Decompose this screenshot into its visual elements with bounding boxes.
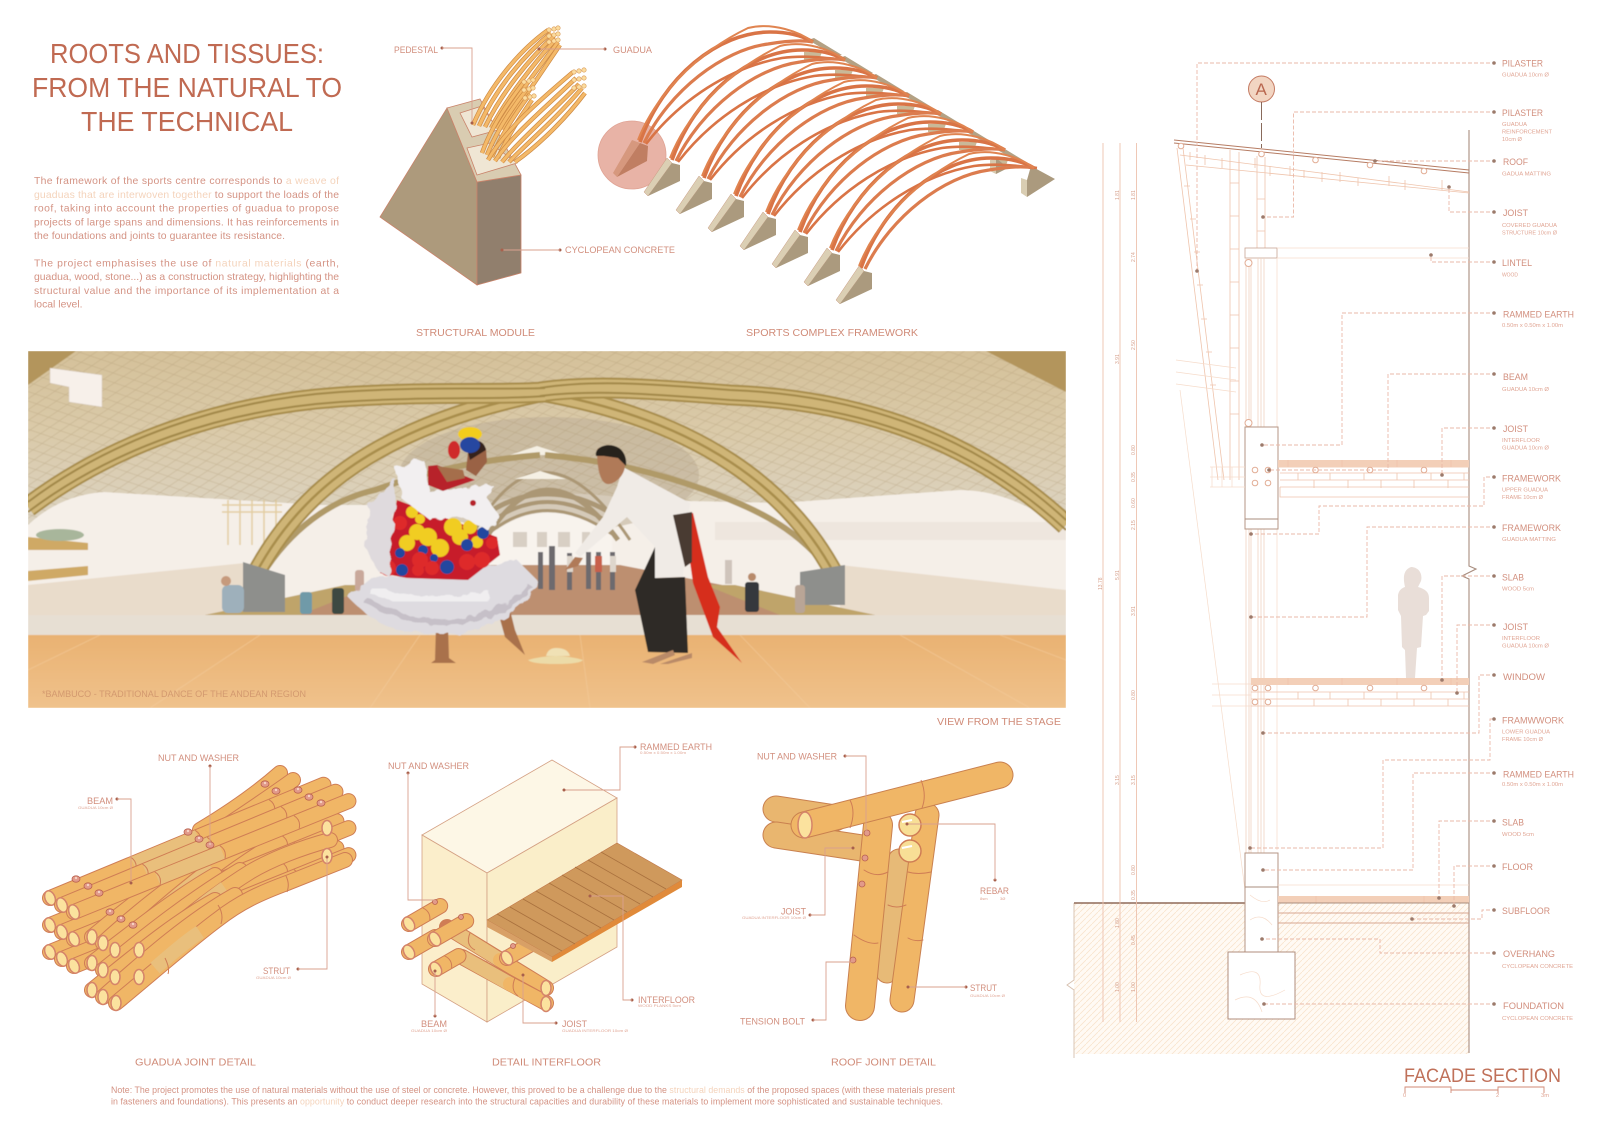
label: tension bolt xyxy=(740,962,853,1028)
label: beam: GUADUA 10cm Ø xyxy=(411,1028,447,1033)
labels: section materials: PILASTER xyxy=(1502,58,1543,70)
label: nut and washer: NUT AND WASHER xyxy=(158,753,239,764)
label: cyclopean concrete xyxy=(500,245,675,256)
labels: section materials: GADUA MATTING xyxy=(1502,172,1552,178)
labels: section materials: FLOOR xyxy=(1502,862,1533,873)
text block: natural materials: guadua, wood, stone...) as a construction strategy, highlighting the xyxy=(34,272,339,283)
rebar circles xyxy=(850,814,921,963)
dimension lines: 3.91 xyxy=(1131,606,1137,616)
label: strut: STRUT xyxy=(263,966,290,977)
top beams xyxy=(43,778,351,921)
labels: section materials: SLAB xyxy=(1502,572,1524,584)
dimension lines: 0.80 xyxy=(1131,445,1137,455)
labels: section materials: FRAMEWORK xyxy=(1502,523,1562,534)
label: rammed earth: 0.50m x 0.50m x 1.00m xyxy=(640,750,687,755)
dimension lines: 1.00 xyxy=(1115,982,1121,992)
labels: section materials: WOOD 5cm xyxy=(1502,586,1534,592)
label: beam xyxy=(411,970,447,1033)
drawing: facade section xyxy=(1067,58,1574,1058)
dimension lines: 5.91 xyxy=(1115,570,1121,580)
dimension lines: 1.81 xyxy=(1115,190,1121,200)
dimension lines: 0.45 xyxy=(1131,935,1137,945)
text block: framework description: the foundations and joints to guarantee its resistance. xyxy=(34,231,285,242)
dimension lines: 1.81 xyxy=(1131,190,1137,200)
title: THE TECHNICAL xyxy=(81,106,293,137)
upper rammed earth xyxy=(1245,427,1278,529)
label: nut and washer xyxy=(757,752,866,833)
labels: section materials: BEAM xyxy=(1503,372,1528,383)
caption: view from the stage: VIEW FROM THE STAGE xyxy=(937,716,1061,728)
concrete block xyxy=(380,99,521,285)
label: rammed earth xyxy=(562,742,712,792)
labels: section materials: WOOD 5cm xyxy=(1502,832,1534,838)
diagram: guadua joint detail xyxy=(43,753,351,1010)
labels: section materials: COVERED GUADUA xyxy=(1502,223,1557,229)
label: strut: GUADUA 10cm Ø xyxy=(970,993,1005,998)
label: pedestal xyxy=(394,45,474,124)
text block: natural materials: The project emphasises the use of natural materials (earth, xyxy=(34,258,339,270)
caption: sports complex framework: SPORTS COMPLEX FRAMEWORK xyxy=(746,327,918,339)
caption: structural module: STRUCTURAL MODULE xyxy=(416,327,535,339)
label: joist xyxy=(522,974,628,1033)
ceiling xyxy=(28,351,1066,533)
lower struts xyxy=(92,825,345,1003)
labels: section materials: REINFORCEMENT xyxy=(1502,130,1552,136)
foundation xyxy=(1228,853,1469,1019)
note text xyxy=(111,1085,956,1106)
labels: section materials: FRAME 10cm Ø xyxy=(1502,495,1543,501)
label: nut and washer: NUT AND WASHER xyxy=(757,752,837,762)
title: ROOTS AND TISSUES: xyxy=(50,38,324,69)
labels: section materials: ROOF xyxy=(1503,157,1528,168)
caption: guadua joint detail: GUADUA JOINT DETAIL xyxy=(135,1056,256,1068)
label: strut xyxy=(906,983,1005,998)
label: beam xyxy=(78,796,132,884)
labels: section materials: CYCLOPEAN CONCRETE xyxy=(1502,1016,1573,1022)
dancer: woman xyxy=(348,427,537,663)
label: joist xyxy=(742,846,854,920)
dimension lines: 2.74 xyxy=(1131,252,1137,262)
labels: section materials: GUADUA 10cm Ø xyxy=(1502,387,1549,393)
section mark A xyxy=(1248,76,1274,148)
highlight circle xyxy=(598,121,666,189)
section mark A: A xyxy=(1256,80,1268,99)
dancer: man xyxy=(565,445,742,664)
labels: section materials: 0.50m x 0.50m x 1.00m xyxy=(1502,323,1563,329)
arches xyxy=(638,26,1037,269)
labels: section materials: 10cm Ø xyxy=(1502,137,1522,143)
lower slab xyxy=(1212,678,1469,706)
label: guadua: GUADUA xyxy=(613,45,653,56)
dimension lines: 0.80 xyxy=(1131,865,1137,875)
label: tension bolt: TENSION BOLT xyxy=(740,1016,805,1028)
labels: section materials: FRAME 10cm Ø xyxy=(1502,737,1543,743)
text block: framework description: guaduas that are interwoven together to support the loads of the xyxy=(34,190,339,201)
label: interfloor: INTERFLOOR xyxy=(638,995,695,1006)
bamboo arches xyxy=(28,383,1066,575)
text block: framework description xyxy=(34,176,339,242)
far tunnel xyxy=(476,446,632,547)
upper struts xyxy=(200,773,293,835)
labels: section materials: GUADUA xyxy=(1502,122,1527,128)
label: strut: STRUT xyxy=(970,983,997,994)
labels: section materials: STRUCTURE 10cm Ø xyxy=(1502,230,1557,236)
labels: section materials: JOIST xyxy=(1503,208,1528,219)
human silhouette xyxy=(1398,567,1429,678)
scale bar: 0 xyxy=(1403,1093,1406,1099)
text block: natural materials: local level. xyxy=(34,300,83,310)
scale bar xyxy=(1403,1087,1549,1099)
heading: facade section: FACADE SECTION xyxy=(1404,1065,1561,1087)
dimension lines: 0.35 xyxy=(1131,472,1137,482)
leader lines xyxy=(1195,63,1492,1006)
nuts xyxy=(72,781,325,928)
labels: section materials: GUADUA 10cm Ø xyxy=(1502,72,1549,78)
diagram: roof joint detail xyxy=(740,752,1009,1028)
render: view from the stage xyxy=(28,351,1066,708)
note text: in fasteners and foundations). This presents an opportunity to conduct deeper research into the structural capacities and durability of these materials to implement more sophisticated and sustainable techniques. xyxy=(111,1096,943,1106)
ridge blocks xyxy=(804,38,1029,168)
labels: section materials: LOWER GUADUA xyxy=(1502,730,1550,736)
labels: section materials: WOOD xyxy=(1502,272,1518,278)
labels: section materials: UPPER GUADUA xyxy=(1502,488,1548,494)
label: beam: BEAM xyxy=(421,1019,447,1030)
labels: section materials: FOUNDATION xyxy=(1503,1001,1564,1012)
label: joist: JOIST xyxy=(562,1019,587,1030)
upper slab xyxy=(1210,460,1469,497)
label: interfloor: WOOD PLANKS 5cm xyxy=(638,1003,682,1008)
label: beam: BEAM xyxy=(87,796,113,807)
tubes xyxy=(401,900,551,1012)
label: joist: JOIST xyxy=(781,906,806,918)
rammed earth block xyxy=(422,760,617,1022)
labels: section materials: CYCLOPEAN CONCRETE xyxy=(1502,964,1573,970)
labels: section materials: JOIST xyxy=(1503,622,1528,633)
labels: section materials: PILASTER xyxy=(1502,108,1543,119)
labels: section materials: INTERFLOOR xyxy=(1502,438,1540,444)
text block: natural materials: structural value and the importance of its implementation at a xyxy=(34,286,339,297)
label: nut and washer xyxy=(388,761,469,900)
diagram: detail interfloor xyxy=(388,742,712,1033)
label: rebar: 8sm xyxy=(980,896,988,901)
lower beams xyxy=(43,807,351,975)
dimension lines: 0.60 xyxy=(1131,498,1137,508)
labels: section materials xyxy=(1492,58,1574,1022)
label: interfloor xyxy=(588,894,695,1008)
scale bar: 3m xyxy=(1541,1093,1549,1099)
right cut line xyxy=(1462,130,1476,1053)
strut ends xyxy=(87,820,332,1010)
side walls xyxy=(28,500,1066,615)
scale bar: 2 xyxy=(1496,1093,1499,1099)
struts xyxy=(854,815,931,1006)
bamboo bundles xyxy=(473,26,586,162)
dimension lines: 13.78 xyxy=(1098,577,1104,590)
labels: section materials: FRAMWWORK xyxy=(1502,716,1565,726)
label: rebar: 3Ø xyxy=(1000,896,1005,901)
lintel and window mullions xyxy=(1245,248,1469,853)
labels: section materials: FRAMEWORK xyxy=(1502,474,1562,484)
dimension lines: 1.00 xyxy=(1131,982,1137,992)
photo note: *BAMBUCO - TRADITIONAL DANCE OF THE ANDEAN REGION xyxy=(42,689,306,699)
label: rebar xyxy=(906,822,1009,901)
diagram: sports complex framework xyxy=(598,26,1055,304)
rafter xyxy=(798,775,1000,838)
text block: natural materials xyxy=(34,258,339,310)
labels: section materials: GUADUA 10cm Ø xyxy=(1502,446,1549,452)
joist tubes xyxy=(776,809,862,848)
label: strut: GUADUA 10cm Ø xyxy=(256,975,291,980)
dimension lines: 3.91 xyxy=(1115,354,1121,364)
label: pedestal: PEDESTAL xyxy=(394,45,439,56)
dimension lines: 0.35 xyxy=(1131,890,1137,900)
labels: section materials: SUBFLOOR xyxy=(1502,906,1550,917)
audience floor xyxy=(205,562,875,615)
label: guadua xyxy=(538,45,653,56)
dimension lines xyxy=(1098,143,1137,1022)
dimension lines: 3.15 xyxy=(1115,775,1121,785)
labels: section materials: SLAB xyxy=(1502,818,1524,828)
pedestals xyxy=(613,140,872,304)
paper corner xyxy=(50,368,102,407)
note text: Note: The project promotes the use of natural materials without the use of steel or concrete. However, this proved to be a challenge due to the structural demands of the proposed spaces (with these materials present xyxy=(111,1085,956,1095)
dimension lines: 0.80 xyxy=(1131,690,1137,700)
title xyxy=(32,38,342,137)
labels: section materials: GUADUA MATTING xyxy=(1502,537,1557,543)
text block: framework description: roof, taking into account the properties of guadua to propose xyxy=(34,204,339,214)
dimension lines: 2.15 xyxy=(1131,520,1137,530)
labels: section materials: JOIST xyxy=(1503,424,1528,435)
label: joist: GUADUA INTERFLOOR 10cm Ø xyxy=(742,915,806,920)
label: nut and washer xyxy=(158,753,239,845)
label: joist: GUADUA INTERFLOOR 10cm Ø xyxy=(562,1028,628,1033)
roof xyxy=(1174,140,1469,193)
dimension lines: 2.50 xyxy=(1131,340,1137,350)
interfloor plank xyxy=(487,843,682,962)
text block: framework description: projects of large spans and dimensions. It has reinforcements in xyxy=(34,218,339,228)
label: cyclopean concrete: CYCLOPEAN CONCRETE xyxy=(565,245,675,256)
rear pedestals xyxy=(990,158,1055,197)
label: beam: GUADUA 10cm Ø xyxy=(78,805,113,810)
labels: section materials: RAMMED EARTH xyxy=(1503,770,1574,780)
labels: section materials: OVERHANG xyxy=(1503,949,1555,960)
soil xyxy=(1067,903,1469,1058)
label: rammed earth: RAMMED EARTH xyxy=(640,742,712,753)
caption: roof joint detail: ROOF JOINT DETAIL xyxy=(831,1056,936,1068)
hat xyxy=(528,648,583,664)
labels: section materials: RAMMED EARTH xyxy=(1503,310,1574,320)
caption: detail interfloor: DETAIL INTERFLOOR xyxy=(492,1056,601,1068)
labels: section materials: GUADUA 10cm Ø xyxy=(1502,644,1549,650)
labels: section materials: INTERFLOOR xyxy=(1502,636,1540,642)
dimension lines: 1.80 xyxy=(1115,918,1121,928)
labels: section materials: LINTEL xyxy=(1502,258,1533,269)
labels: section materials: 0.50m x 0.50m x 1.00m xyxy=(1502,782,1563,788)
title: FROM THE NATURAL TO xyxy=(32,72,342,103)
inclined strut and columns xyxy=(1176,148,1265,890)
dimension lines: 3.15 xyxy=(1131,775,1137,785)
diagram: structural module xyxy=(380,26,675,285)
label: nut and washer: NUT AND WASHER xyxy=(388,761,469,772)
label: rebar: REBAR xyxy=(980,886,1009,897)
labels: section materials: WINDOW xyxy=(1503,672,1546,683)
label: strut xyxy=(256,856,328,980)
stage floor xyxy=(28,615,1066,708)
audience people xyxy=(221,546,805,614)
text block: framework description: The framework of the sports centre corresponds to a weave of xyxy=(34,176,339,187)
